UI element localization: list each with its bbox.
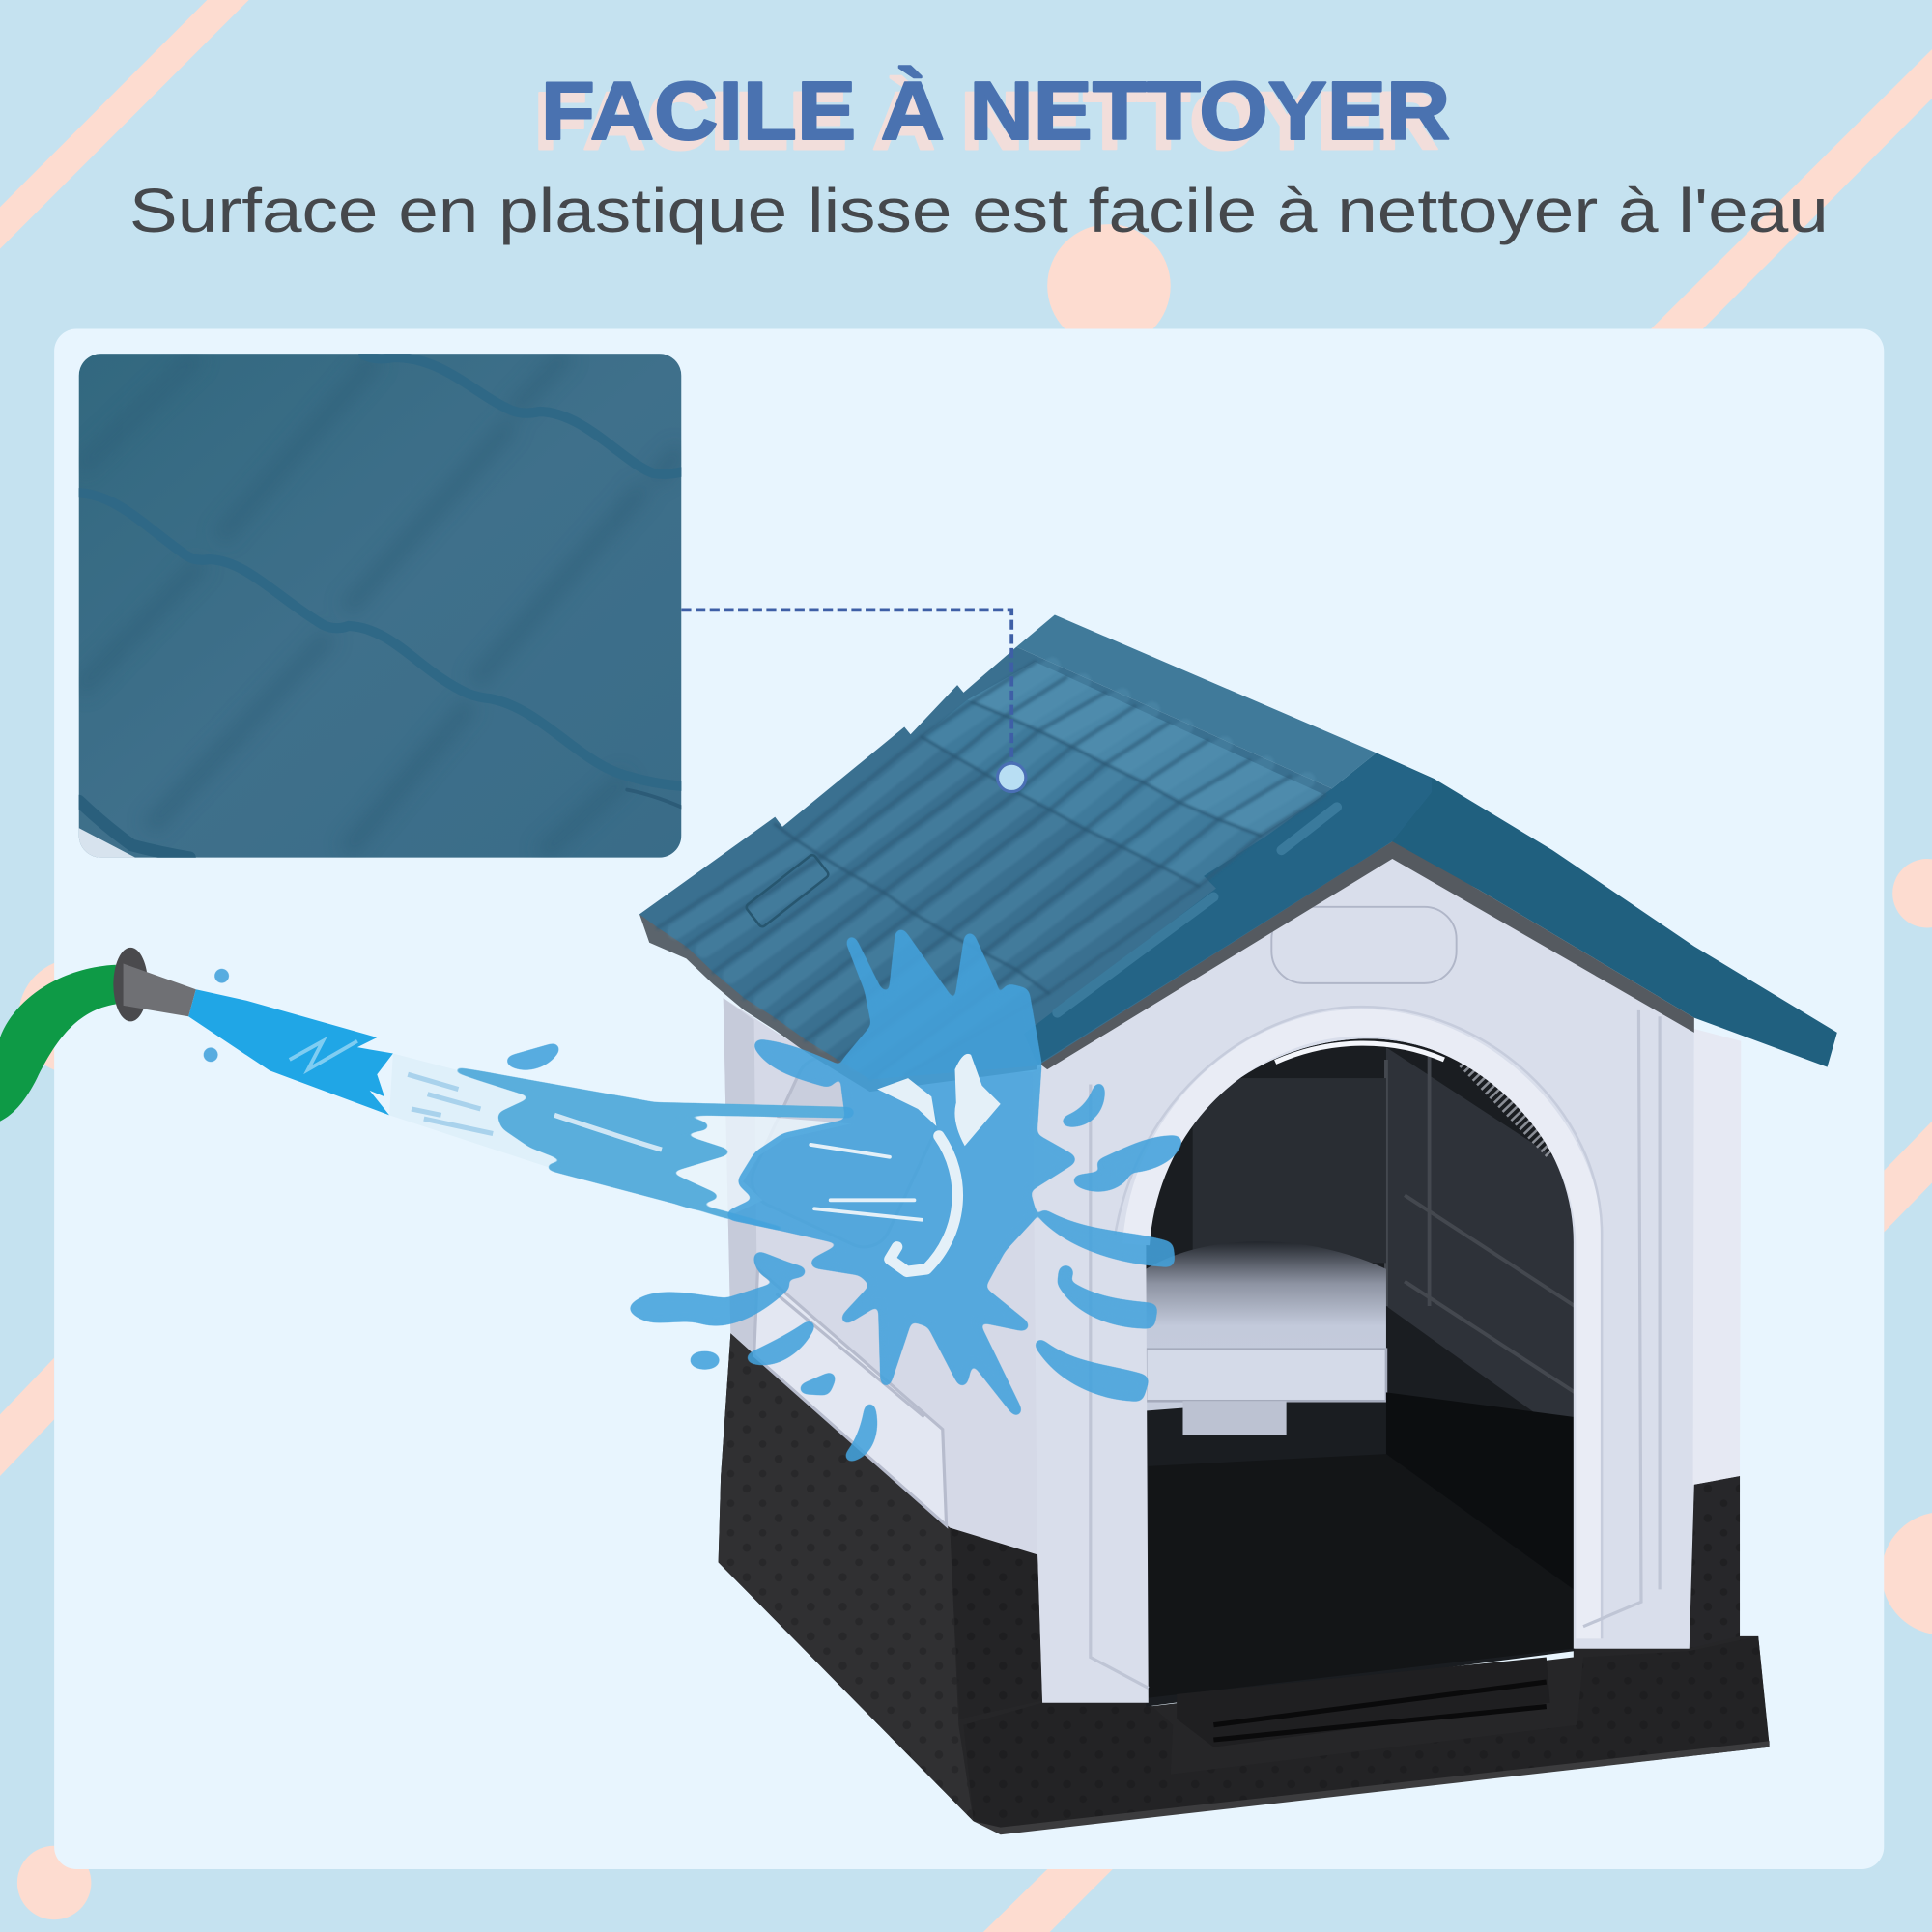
tile row boundaries [775,702,1261,993]
jet mid-blue section [455,1069,851,1230]
roof front band rib [1057,807,1337,1012]
droplets [759,1045,839,1082]
title: FACILE À NETTOYER [541,66,1450,157]
nozzle [113,948,196,1021]
water jet [188,934,1177,1457]
arch trim [1136,1023,1589,1638]
roof [639,614,1837,1092]
roof right eave [1377,753,1837,1067]
splash thin streaks [810,1136,957,1271]
hose [0,965,116,1122]
roof front band [1024,753,1432,1065]
pillar grooves [1091,1010,1660,1688]
inset: roof close-up [79,354,681,858]
roof middle row of tiles [922,699,1261,886]
subtitle: Surface en plastique lisse est facile à nettoyer à l'eau [129,176,1829,245]
splash [209,934,1177,1457]
roof ribs [658,662,1324,1079]
roof slope [639,647,1392,1079]
roof hatch [745,854,830,928]
roof ridge [1016,614,1377,788]
roof eave underside [639,914,1037,1092]
side wall embossed panel and vent [743,1048,947,1525]
callout connector [681,610,1026,792]
right side strip [1693,1029,1741,1485]
base: black plinth and side [719,1333,1770,1834]
jet pale fingers [654,1108,851,1229]
dog house [639,614,1837,1834]
side wall [724,998,1041,1555]
jet pale section [389,1054,578,1167]
main panel [54,329,1884,1869]
jet bright head [188,989,393,1115]
title: FACILE À NETTOYER [533,75,1439,167]
front wall with arch [1033,859,1694,1703]
gable plaque [1271,907,1457,983]
roof top row of tiles [967,662,1324,836]
arch rim highlight [1275,1043,1444,1062]
splash white streaks [877,1054,1001,1146]
interior of the kennel [1146,1038,1575,1747]
